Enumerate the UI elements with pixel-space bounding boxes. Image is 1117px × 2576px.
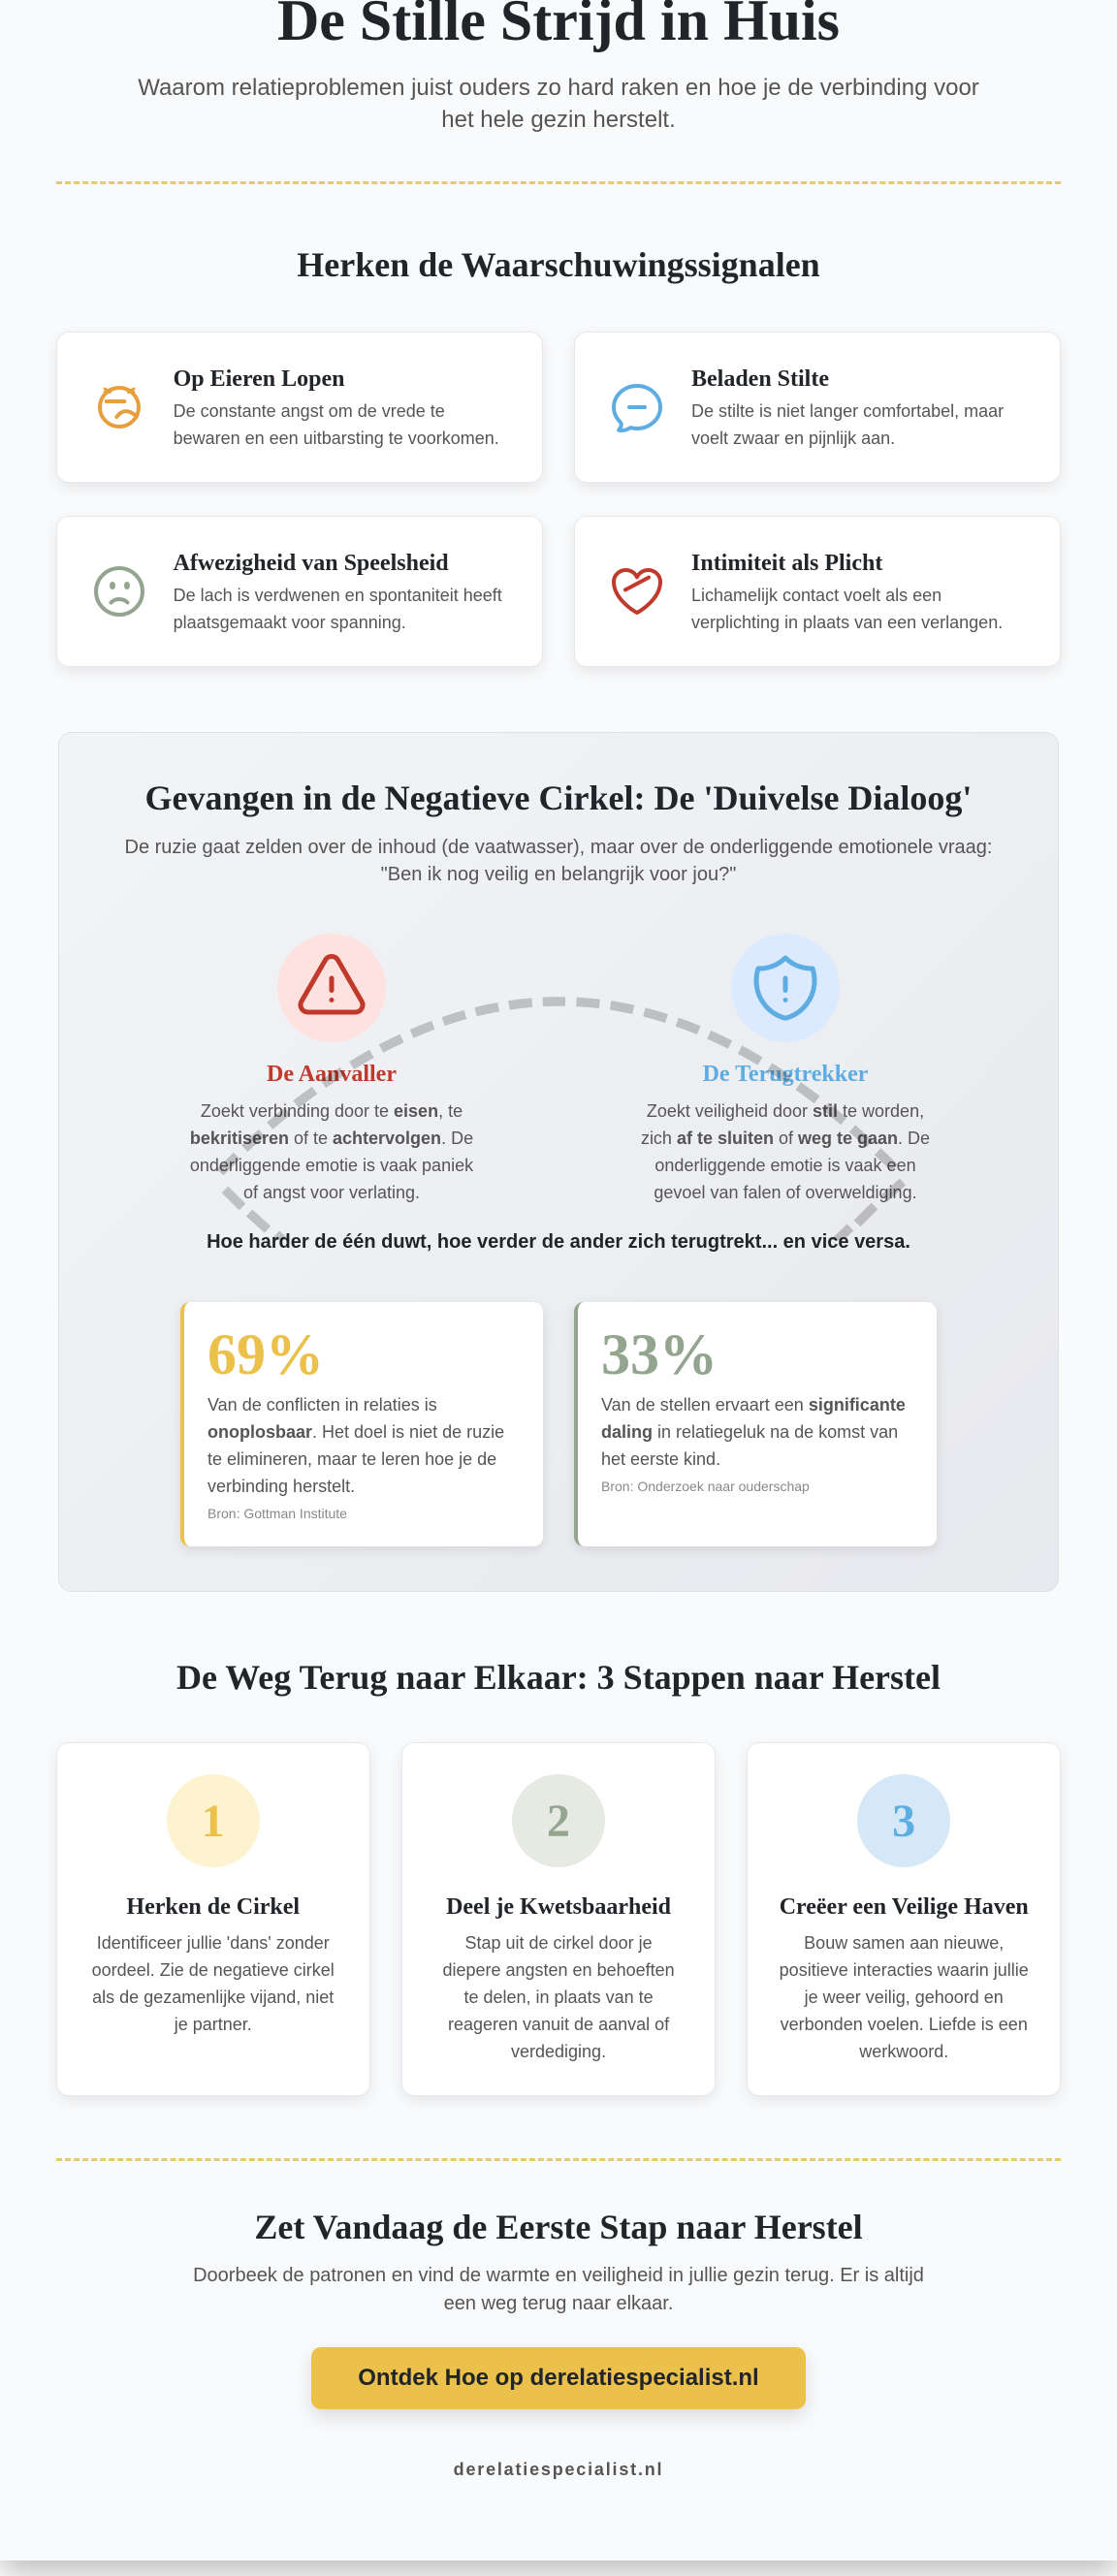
stat text: onoplosbaar. Het doel is niet de ruzie bbox=[207, 1422, 504, 1442]
step text: oordeel. Zie de negatieve cirkel bbox=[92, 1960, 335, 1980]
step text: je partner. bbox=[175, 2015, 252, 2034]
text: de terugtrekker bbox=[641, 1101, 930, 1202]
icon: speech bubble bbox=[612, 384, 662, 432]
card title: Op Eieren Lopen bbox=[174, 366, 345, 392]
arrow: dashed cycle arc bbox=[217, 997, 906, 1240]
panel heading: Gevangen in de Negatieve Cirkel: De 'Duivelse Dialoog' bbox=[145, 779, 972, 817]
card title: Afwezigheid van Speelsheid bbox=[174, 551, 449, 576]
text: de aanvaller: of angst voor verlating. bbox=[243, 1183, 420, 1202]
icon: shield bbox=[731, 934, 840, 1042]
card text: verplichting in plaats van een verlangen. bbox=[691, 613, 1003, 632]
step text: diepere angsten en behoeften bbox=[442, 1960, 675, 1980]
step text bbox=[780, 1933, 1029, 2061]
card title: Beladen Stilte bbox=[691, 366, 829, 392]
step text: verbonden voelen. Liefde is een bbox=[781, 2015, 1028, 2034]
text: de aanvaller bbox=[190, 1101, 473, 1202]
cta button bbox=[311, 2347, 806, 2409]
stat text: te elimineren, maar te leren hoe je de bbox=[207, 1449, 496, 1469]
step text bbox=[92, 1933, 335, 2034]
step title: Creëer een Veilige Haven bbox=[780, 1894, 1029, 1920]
card text: De lach is verdwenen en spontaniteit heeft bbox=[174, 586, 502, 605]
step text: Identificeer jullie 'dans' zonder bbox=[97, 1933, 330, 1953]
stat text bbox=[601, 1395, 906, 1469]
stat text: verbinding herstelt. bbox=[207, 1477, 355, 1496]
text: de terugtrekker: gevoel van falen of overweldiging. bbox=[654, 1183, 917, 1202]
callout: vicieuze cirkel: Hoe harder de één duwt, hoe verder de ander zich terugtrekt... en vice versa. bbox=[207, 1231, 910, 1253]
card text bbox=[691, 586, 1003, 632]
step text: positieve interacties waarin jullie bbox=[780, 1960, 1029, 1980]
card: beladen stilte bbox=[575, 333, 1060, 482]
step text: Stap uit de cirkel door je bbox=[464, 1933, 653, 1953]
step text: je weer veilig, gehoord en bbox=[805, 1988, 1004, 2007]
label: de terugtrekker: De Terugtrekker bbox=[703, 1062, 868, 1087]
cta text: Doorbeek de patronen en vind de warmte en veiligheid in jullie gezin terug. Er is altijd bbox=[193, 2265, 924, 2286]
card text bbox=[691, 401, 1004, 448]
stat number: 33% bbox=[601, 1322, 718, 1386]
step 2 bbox=[402, 1743, 715, 2095]
step text: Bouw samen aan nieuwe, bbox=[804, 1933, 1004, 1953]
panel intro: "Ben ik nog veilig en belangrijk voor jou?" bbox=[381, 864, 736, 885]
step number bbox=[857, 1774, 950, 1867]
card text: plaatsgemaakt voor spanning. bbox=[174, 613, 406, 632]
card text: bewaren en een uitbarsting te voorkomen. bbox=[174, 429, 499, 448]
text: de terugtrekker: Zoekt veiligheid door stil te worden, bbox=[647, 1101, 924, 1121]
step number: 1 bbox=[202, 1796, 225, 1847]
step text: als de gezamenlijke vijand, niet bbox=[92, 1988, 334, 2007]
heading: waarschuwingssignalen: Herken de Waarschuwingssignalen bbox=[297, 245, 820, 284]
step text: verdediging. bbox=[511, 2042, 606, 2061]
cta text: een weg terug naar elkaar. bbox=[444, 2292, 673, 2313]
card: afwezigheid van speelsheid bbox=[57, 517, 542, 666]
card text bbox=[174, 586, 502, 632]
step text: werkwoord. bbox=[859, 2042, 948, 2061]
icon: sad face bbox=[94, 566, 144, 617]
text: de aanvaller: bekritiseren of te achtervolgen. De bbox=[190, 1129, 473, 1148]
footer brand: derelatiespecialist.nl bbox=[454, 2460, 663, 2479]
step text bbox=[442, 1933, 675, 2061]
stat number: 69% bbox=[207, 1322, 324, 1386]
subtitle: Waarom relatieproblemen juist ouders zo hard raken en hoe je de verbinding voor bbox=[138, 75, 979, 101]
stat text: het eerste kind. bbox=[601, 1449, 720, 1469]
card: intimiteit als plicht bbox=[575, 517, 1060, 666]
text: de aanvaller: Zoekt verbinding door te eisen, te bbox=[201, 1101, 463, 1121]
stat source: Bron: Onderzoek naar ouderschap bbox=[601, 1479, 810, 1494]
step number bbox=[167, 1774, 260, 1867]
step 3 bbox=[748, 1743, 1060, 2095]
card title: Intimiteit als Plicht bbox=[691, 551, 882, 576]
step number: 3 bbox=[892, 1796, 915, 1847]
stat card: 69% bbox=[180, 1302, 543, 1546]
subtitle bbox=[138, 75, 979, 132]
heading: call to action: Zet Vandaag de Eerste Stap naar Herstel bbox=[254, 2208, 863, 2246]
card: op eieren lopen bbox=[57, 333, 542, 482]
card text: Lichamelijk contact voelt als een bbox=[691, 586, 941, 605]
icon: tense face bbox=[98, 386, 141, 429]
text: de terugtrekker: zich af te sluiten of weg te gaan. De bbox=[641, 1129, 930, 1148]
card text: voelt zwaar en pijnlijk aan. bbox=[691, 429, 895, 448]
stat text: daling in relatiegeluk na de komst van bbox=[601, 1422, 898, 1442]
step number bbox=[512, 1774, 605, 1867]
stat text bbox=[207, 1395, 504, 1496]
panel intro bbox=[124, 837, 992, 885]
step title: Deel je Kwetsbaarheid bbox=[446, 1894, 671, 1920]
label: de aanvaller: De Aanvaller bbox=[267, 1062, 397, 1087]
cta button: Ontdek Hoe op derelatiespecialist.nl bbox=[358, 2365, 759, 2391]
panel intro: De ruzie gaat zelden over de inhoud (de vaatwasser), maar over de onderliggende emotionele vraag: bbox=[124, 837, 992, 858]
icon: warning triangle bbox=[277, 934, 386, 1042]
heading: stappen: De Weg Terug naar Elkaar: 3 Stappen naar Herstel bbox=[176, 1658, 941, 1697]
step text: reageren vanuit de aanval of bbox=[448, 2015, 669, 2034]
stat text: Van de stellen ervaart een significante bbox=[601, 1395, 906, 1415]
text: de terugtrekker: onderliggende emotie is vaak een bbox=[654, 1156, 916, 1175]
icon: heart with slash bbox=[612, 568, 662, 615]
step text: te delen, in plaats van te bbox=[463, 1988, 654, 2007]
step 1 bbox=[57, 1743, 369, 2095]
cta text bbox=[193, 2265, 924, 2313]
step title: Herken de Cirkel bbox=[126, 1894, 300, 1920]
card text: De stilte is niet langer comfortabel, maar bbox=[691, 401, 1004, 421]
stat text: Van de conflicten in relaties is bbox=[207, 1395, 437, 1415]
panel: negatieve cirkel bbox=[58, 732, 1059, 1592]
subtitle: het hele gezin herstelt. bbox=[441, 107, 676, 132]
step number: 2 bbox=[547, 1796, 570, 1847]
card text bbox=[174, 401, 499, 448]
text: de aanvaller: onderliggende emotie is vaak paniek bbox=[190, 1156, 473, 1175]
stat card: 33% bbox=[574, 1302, 937, 1546]
card text: De constante angst om de vrede te bbox=[174, 401, 445, 421]
stat source: Bron: Gottman Institute bbox=[207, 1506, 347, 1521]
